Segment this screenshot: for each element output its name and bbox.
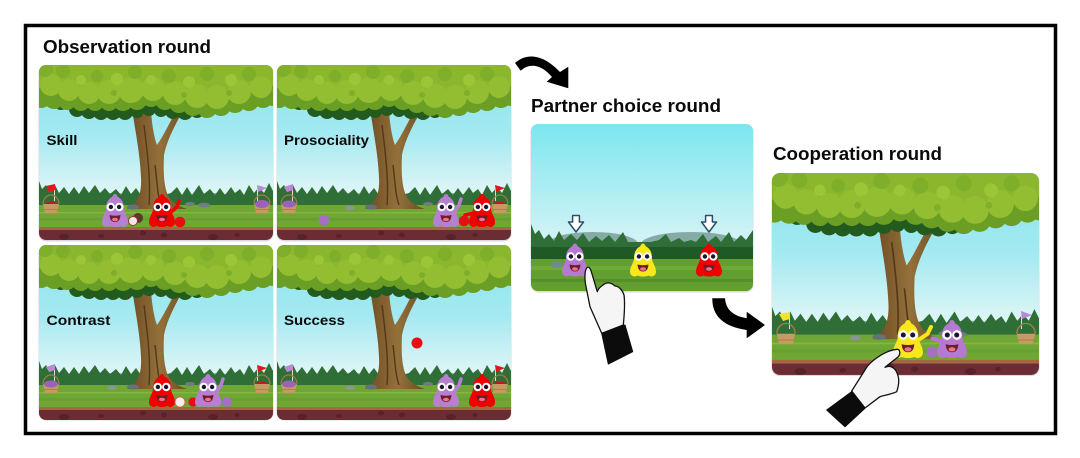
- icon: red ball: [459, 216, 469, 226]
- arrow: partner choice to cooperation: [712, 298, 765, 338]
- character: red: [465, 194, 495, 227]
- panel: prosociality: [269, 61, 521, 242]
- character: red: [469, 374, 495, 407]
- icon: red ball in the air: [412, 338, 422, 348]
- panel: contrast: [31, 241, 283, 420]
- character: yellow: [630, 244, 656, 277]
- icon: purple flag and basket: [281, 364, 297, 393]
- icon: red flag and basket: [492, 365, 508, 393]
- heading: observation round: Observation round: [43, 37, 211, 57]
- icon: white ball: [175, 397, 185, 407]
- icon: red flag and basket: [492, 185, 508, 213]
- icon: red ball: [188, 397, 198, 407]
- panel: skill: [31, 61, 283, 242]
- panel: partner choice: [530, 124, 754, 292]
- panel: success: [269, 241, 521, 420]
- icon: red flag and basket: [254, 365, 270, 393]
- icon: red flag and basket: [43, 184, 59, 213]
- heading: cooperation round: Cooperation round: [773, 144, 942, 164]
- icon: purple flag and empty basket: [1017, 311, 1035, 344]
- panel: cooperation: [763, 168, 1050, 376]
- character: purple waving: [433, 194, 461, 227]
- character: purple waving: [195, 374, 223, 407]
- icon: purple flag and basket: [281, 184, 297, 213]
- label: success: Success: [284, 312, 345, 328]
- character: yellow waving: [893, 320, 931, 358]
- icon: pointing hand on purple: [585, 267, 633, 364]
- label: skill: Skill: [46, 132, 78, 148]
- character: red waving: [149, 194, 179, 227]
- character: purple waving: [932, 320, 967, 358]
- icon: yellow flag and empty basket: [777, 312, 795, 344]
- icon: purple ball: [222, 397, 232, 407]
- icon: down arrow over purple: [568, 216, 584, 232]
- icon: coconut: [128, 213, 143, 226]
- character: purple: [562, 244, 588, 277]
- icon: down arrow over red: [702, 216, 716, 232]
- character: red: [149, 374, 175, 407]
- character: purple: [102, 194, 128, 227]
- icon: pointing hand on yellow: [827, 349, 900, 427]
- icon: purple flag and basket: [43, 364, 59, 393]
- icon: purple flag and basket: [254, 185, 270, 213]
- character: purple waving: [433, 374, 461, 407]
- label: prosociality: Prosociality: [284, 132, 369, 148]
- heading: partner choice round: Partner choice round: [531, 96, 721, 116]
- icon: purple ball: [926, 346, 938, 358]
- icon: red ball: [175, 217, 185, 227]
- arrow: observation to partner choice: [515, 56, 568, 88]
- character: red: [696, 244, 722, 277]
- icon: purple ball: [319, 215, 329, 225]
- label: contrast: Contrast: [46, 312, 111, 328]
